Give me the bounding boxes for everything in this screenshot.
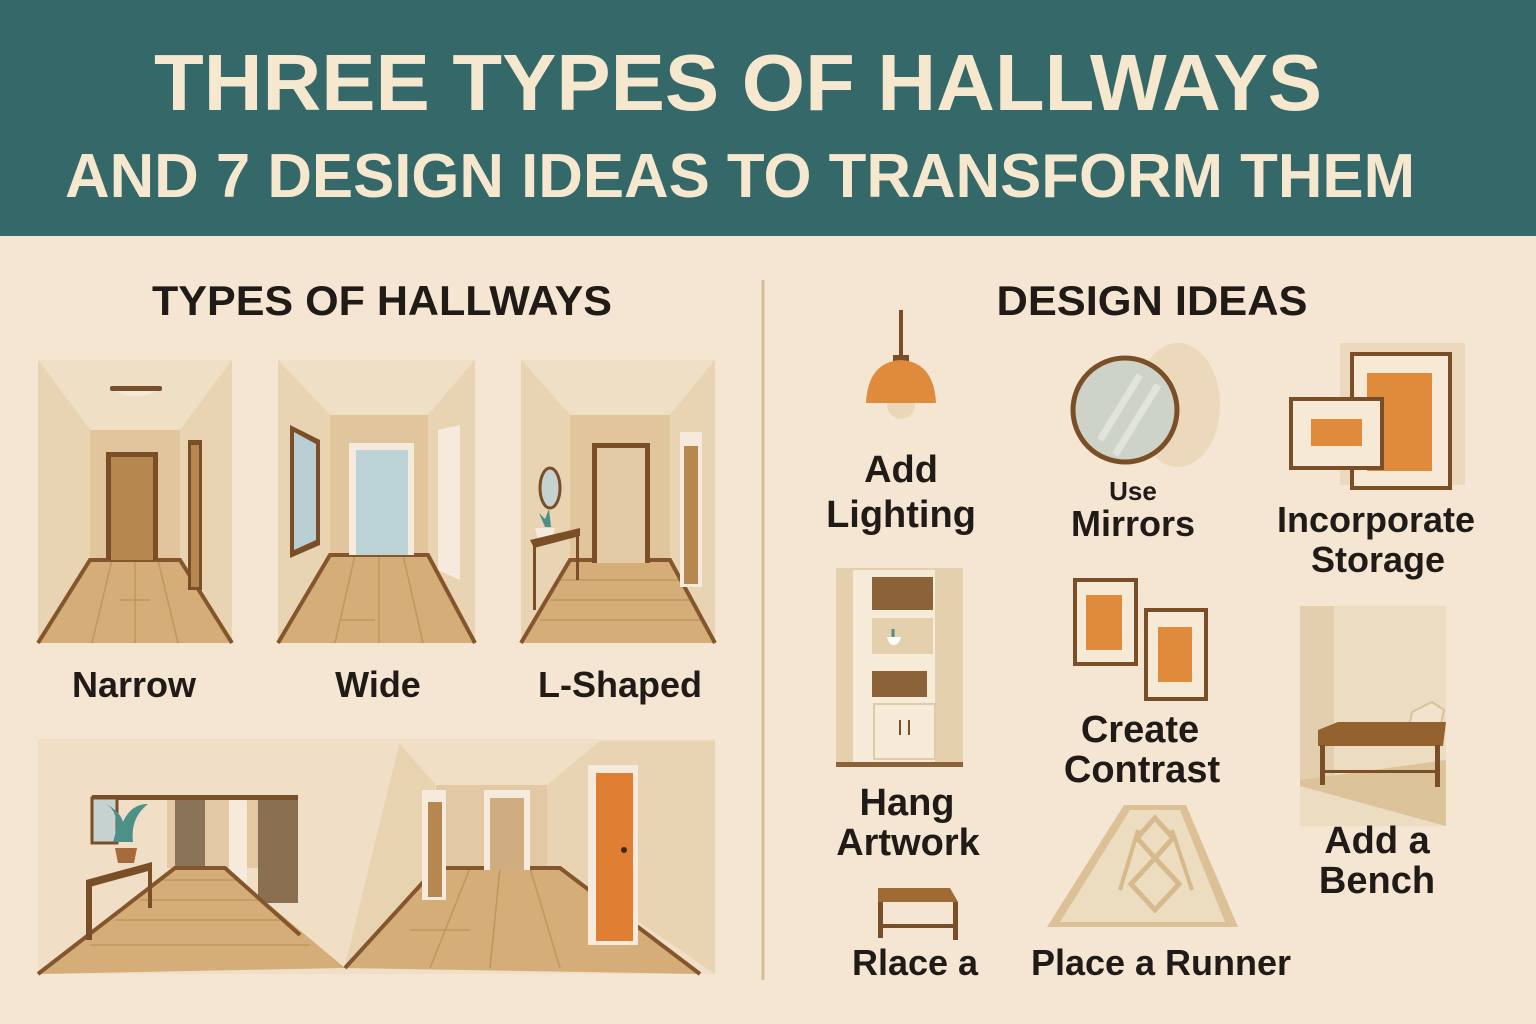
label: use mirrors: Mirrors (1071, 503, 1195, 544)
label: place a runner: Place a Runner (1031, 942, 1291, 983)
label: add a bench: Bench (1319, 860, 1435, 902)
label: incorporate storage: Incorporate (1277, 499, 1475, 540)
title: AND 7 DESIGN IDEAS TO TRANSFORM THEM (65, 142, 1415, 211)
panel: narrow hallway (38, 360, 232, 643)
icon: small table (878, 888, 958, 940)
icon: mirror (1073, 343, 1220, 467)
title: THREE TYPES OF HALLWAYS (154, 38, 1322, 127)
label: narrow: Narrow (72, 664, 197, 705)
label: create contrast: Contrast (1064, 749, 1220, 791)
icon: contrast frames (1075, 580, 1206, 699)
panel: L-shaped hallway (521, 360, 715, 643)
label: add lighting: Lighting (826, 494, 976, 536)
label: hang artwork: Hang (860, 782, 954, 824)
icon: runner rug (1047, 805, 1238, 927)
label: add a bench: Add a (1324, 820, 1431, 862)
panel: wide hallway (278, 360, 475, 643)
label: add lighting: Add (864, 449, 938, 491)
label: use mirrors: Use (1109, 476, 1157, 506)
label: rlace a: Rlace a (852, 942, 979, 983)
panel: combined hallway scene (38, 739, 715, 974)
label: add a bench (1319, 820, 1435, 902)
label: use mirrors (1071, 476, 1195, 544)
label: hang artwork: Artwork (836, 822, 981, 864)
label: L-shaped: L-Shaped (538, 664, 702, 705)
icon: pendant lamp (866, 310, 936, 419)
icon: bench nook (1300, 606, 1446, 826)
heading: design ideas: DESIGN IDEAS (996, 277, 1308, 324)
icon: shelf unit (836, 568, 963, 767)
label: wide: Wide (335, 664, 421, 705)
label: hang artwork (836, 782, 981, 864)
label: add lighting (826, 449, 976, 536)
icon: storage frames (1291, 343, 1465, 488)
label: create contrast (1064, 709, 1220, 791)
label: incorporate storage: Storage (1311, 539, 1445, 580)
title (65, 38, 1415, 211)
header banner (0, 0, 1536, 236)
label: incorporate storage (1277, 499, 1475, 580)
label: create contrast: Create (1081, 709, 1199, 751)
heading: types of hallways: TYPES OF HALLWAYS (152, 277, 612, 324)
